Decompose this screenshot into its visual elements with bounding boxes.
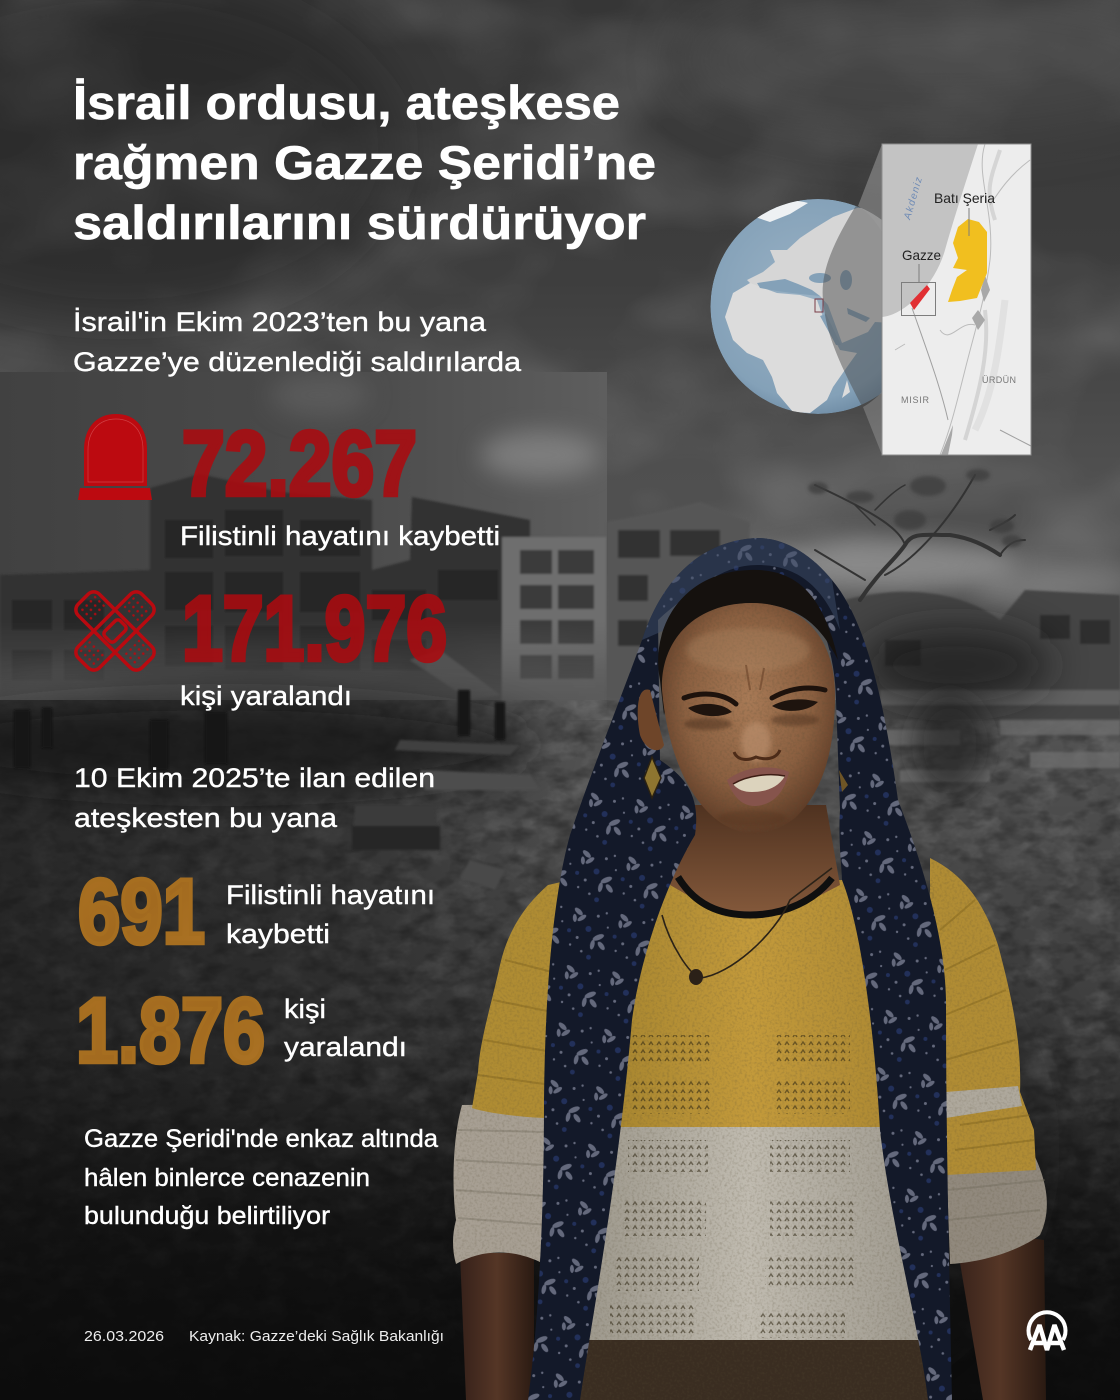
earrings xyxy=(644,757,848,798)
neck xyxy=(670,805,840,915)
zoom wedge xyxy=(858,144,882,232)
hair xyxy=(658,570,838,715)
title: İsrail ordusu, ateşkese xyxy=(73,76,620,129)
face xyxy=(662,603,835,828)
shaded side xyxy=(822,206,882,405)
note: bodies under rubble: hâlen binlerce cenazenin xyxy=(84,1164,370,1192)
torso sweater bands xyxy=(566,880,934,1400)
icon: gravestone xyxy=(78,414,152,500)
locator box on globe xyxy=(815,299,823,312)
note: bodies under rubble: Gazze Şeridi'nde enkaz altında xyxy=(84,1125,438,1153)
globe xyxy=(710,199,882,414)
map labels: MISIR xyxy=(901,395,930,405)
region: West Bank xyxy=(948,219,987,302)
icon: crossed bandages xyxy=(73,589,157,673)
map labels: Gazze xyxy=(902,247,941,263)
title: saldırılarını sürdürüyor xyxy=(73,196,646,249)
nose xyxy=(734,750,780,759)
logo: Anadolu Agency xyxy=(1028,1312,1066,1350)
footer: date and source: Kaynak: Gazze’deki Sağlık Bakanlığı xyxy=(189,1328,444,1345)
stat: total killed xyxy=(78,413,500,551)
subheading: since October 2023: İsrail'in Ekim 2023’ten bu yana xyxy=(73,306,487,337)
caption: Filistinli hayatını xyxy=(226,880,435,910)
stepped rubble at right xyxy=(880,690,1120,782)
map labels: Batı Şeria xyxy=(934,190,995,206)
arms xyxy=(460,1227,1046,1400)
footer: date and source xyxy=(84,1328,444,1345)
mouth xyxy=(727,767,789,806)
number: 72.267: 72.267 xyxy=(182,413,417,515)
eyes xyxy=(684,665,819,730)
map labels: Akdeniz xyxy=(902,175,925,222)
grey undersleeves xyxy=(453,1104,1047,1264)
number: 1.876: 1.876 xyxy=(76,980,265,1082)
headscarf xyxy=(528,538,952,1400)
number: 691: 691 xyxy=(78,861,205,963)
subheading: since the ceasefire: ateşkesten bu yana xyxy=(74,803,338,833)
rubble slabs and silhouettes of people xyxy=(14,690,540,890)
dark smoke xyxy=(860,627,1050,795)
building: right multi-storey block xyxy=(502,537,607,712)
subheading: since October 2023 xyxy=(73,306,522,377)
map labels xyxy=(901,175,1016,405)
necklace xyxy=(662,868,832,985)
inset map xyxy=(882,144,1031,455)
dark ground band under the ruins xyxy=(0,697,540,793)
stat: injured since ceasefire xyxy=(76,980,407,1082)
building: block behind the girl xyxy=(607,502,750,700)
note: bodies under rubble: bulunduğu belirtiliyor xyxy=(84,1202,330,1230)
brows xyxy=(684,688,825,704)
region: Gaza xyxy=(910,285,930,310)
caption xyxy=(226,880,435,949)
title: rağmen Gazze Şeridi’ne xyxy=(73,136,656,189)
note: bodies under rubble xyxy=(84,1125,438,1230)
caption: kişi xyxy=(284,994,326,1024)
caption: yaralandı xyxy=(284,1032,407,1062)
collar xyxy=(678,877,832,915)
yellow sweater sleeves xyxy=(450,855,1050,1270)
number: 171.976: 171.976 xyxy=(182,578,447,680)
stat: total injured xyxy=(73,578,447,711)
Eurasia xyxy=(747,208,882,343)
panel: lighter photo rectangle with ruined buildings xyxy=(0,372,607,720)
ear xyxy=(638,689,664,750)
ruined building at right xyxy=(845,590,1120,720)
locator box and leader lines xyxy=(902,208,969,316)
tree xyxy=(808,469,1025,600)
footer: date and source: 26.03.2026 xyxy=(84,1328,164,1345)
background ruins to the right of the panel xyxy=(607,502,1120,782)
caption xyxy=(284,994,407,1062)
subheading: since the ceasefire xyxy=(74,763,435,833)
title xyxy=(73,76,656,249)
map labels: ÜRDÜN xyxy=(982,375,1016,385)
caption: kişi yaralandı xyxy=(180,681,352,711)
building: central bombed block xyxy=(0,476,531,693)
caption: kaybetti xyxy=(226,919,330,949)
figure: girl in headscarf xyxy=(450,538,1060,1400)
Africa xyxy=(725,283,857,413)
subheading: since October 2023: Gazze’ye düzenlediği saldırılarda xyxy=(73,347,522,377)
knit texture xyxy=(566,880,934,1400)
location map: globe and inset xyxy=(710,144,1031,455)
stat: killed since ceasefire xyxy=(78,861,435,963)
subheading: since the ceasefire: 10 Ekim 2025’te ilan edilen xyxy=(74,763,435,793)
caption: Filistinli hayatını kaybetti xyxy=(180,521,500,551)
